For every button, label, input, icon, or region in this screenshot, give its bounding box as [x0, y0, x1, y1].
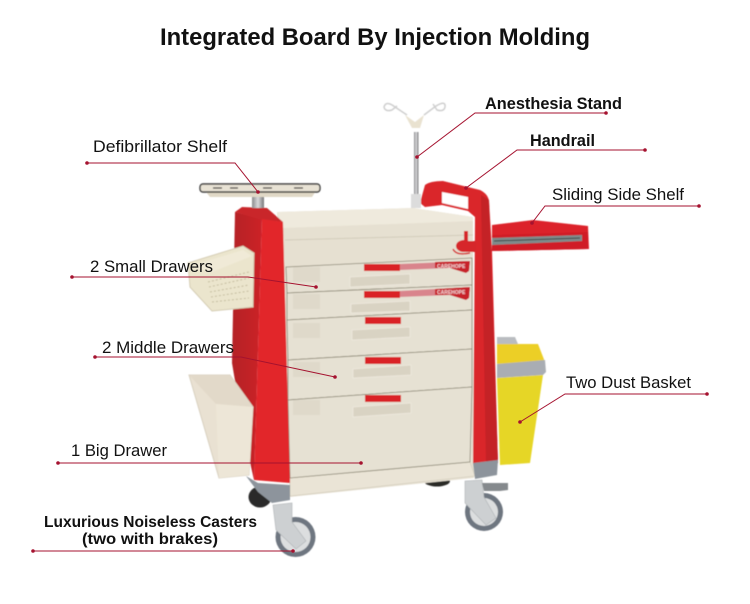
right caster: [465, 480, 508, 531]
brand stripes: [400, 261, 470, 300]
yellow dust basket: [497, 337, 546, 465]
label: Defibrillator Shelf: Defibrillator Shelf: [93, 137, 227, 156]
label: 2 Small Drawers: [70, 257, 318, 289]
label: 2 Middle Drawers: 2 Middle Drawers: [102, 338, 234, 357]
brand stripes: CAREHOPE: [437, 264, 466, 270]
defibrillator shelf: [200, 184, 320, 208]
label: Handrail: [464, 132, 647, 190]
label: Defibrillator Shelf: [85, 137, 260, 194]
title: Integrated Board By Injection Molding: [160, 24, 590, 51]
left foot: [246, 476, 290, 503]
beige side bin: [189, 375, 253, 478]
drawer label recesses: [293, 267, 320, 415]
wire basket: [188, 246, 254, 311]
right red post and handrail: [420, 181, 498, 479]
five drawers: [286, 258, 472, 478]
sliding side shelf: [492, 220, 589, 251]
label: Sliding Side Shelf: Sliding Side Shelf: [552, 185, 684, 204]
label: Luxurious Noiseless Casters: Luxurious Noiseless Casters: [44, 514, 257, 531]
red lock: [453, 231, 476, 254]
label: Anesthesia Stand: [415, 95, 622, 159]
red drawer tags: [364, 264, 401, 402]
label: Two Dust Basket: [518, 373, 709, 424]
label: 1 Big Drawer: 1 Big Drawer: [71, 441, 167, 460]
label: Sliding Side Shelf: [530, 185, 701, 225]
cart body: [277, 208, 475, 497]
label: Two Dust Basket: Two Dust Basket: [566, 373, 691, 392]
label: 1 Big Drawer: [56, 441, 363, 465]
label: 2 Middle Drawers: [93, 338, 337, 379]
front left caster: [273, 503, 316, 557]
back casters: [248, 476, 450, 508]
anesthesia stand: [384, 103, 445, 208]
drawer pulls: [350, 274, 411, 417]
brand stripes: CAREHOPE: [437, 290, 466, 296]
label: Luxurious Noiseless Casters: (two with brakes): [82, 531, 218, 548]
left red post: [232, 207, 290, 503]
label: Handrail: Handrail: [530, 132, 595, 150]
label: Anesthesia Stand: Anesthesia Stand: [485, 95, 622, 113]
label: Luxurious Noiseless Casters: [31, 514, 295, 553]
label: 2 Small Drawers: 2 Small Drawers: [90, 257, 213, 276]
medical trolley: [188, 103, 589, 557]
